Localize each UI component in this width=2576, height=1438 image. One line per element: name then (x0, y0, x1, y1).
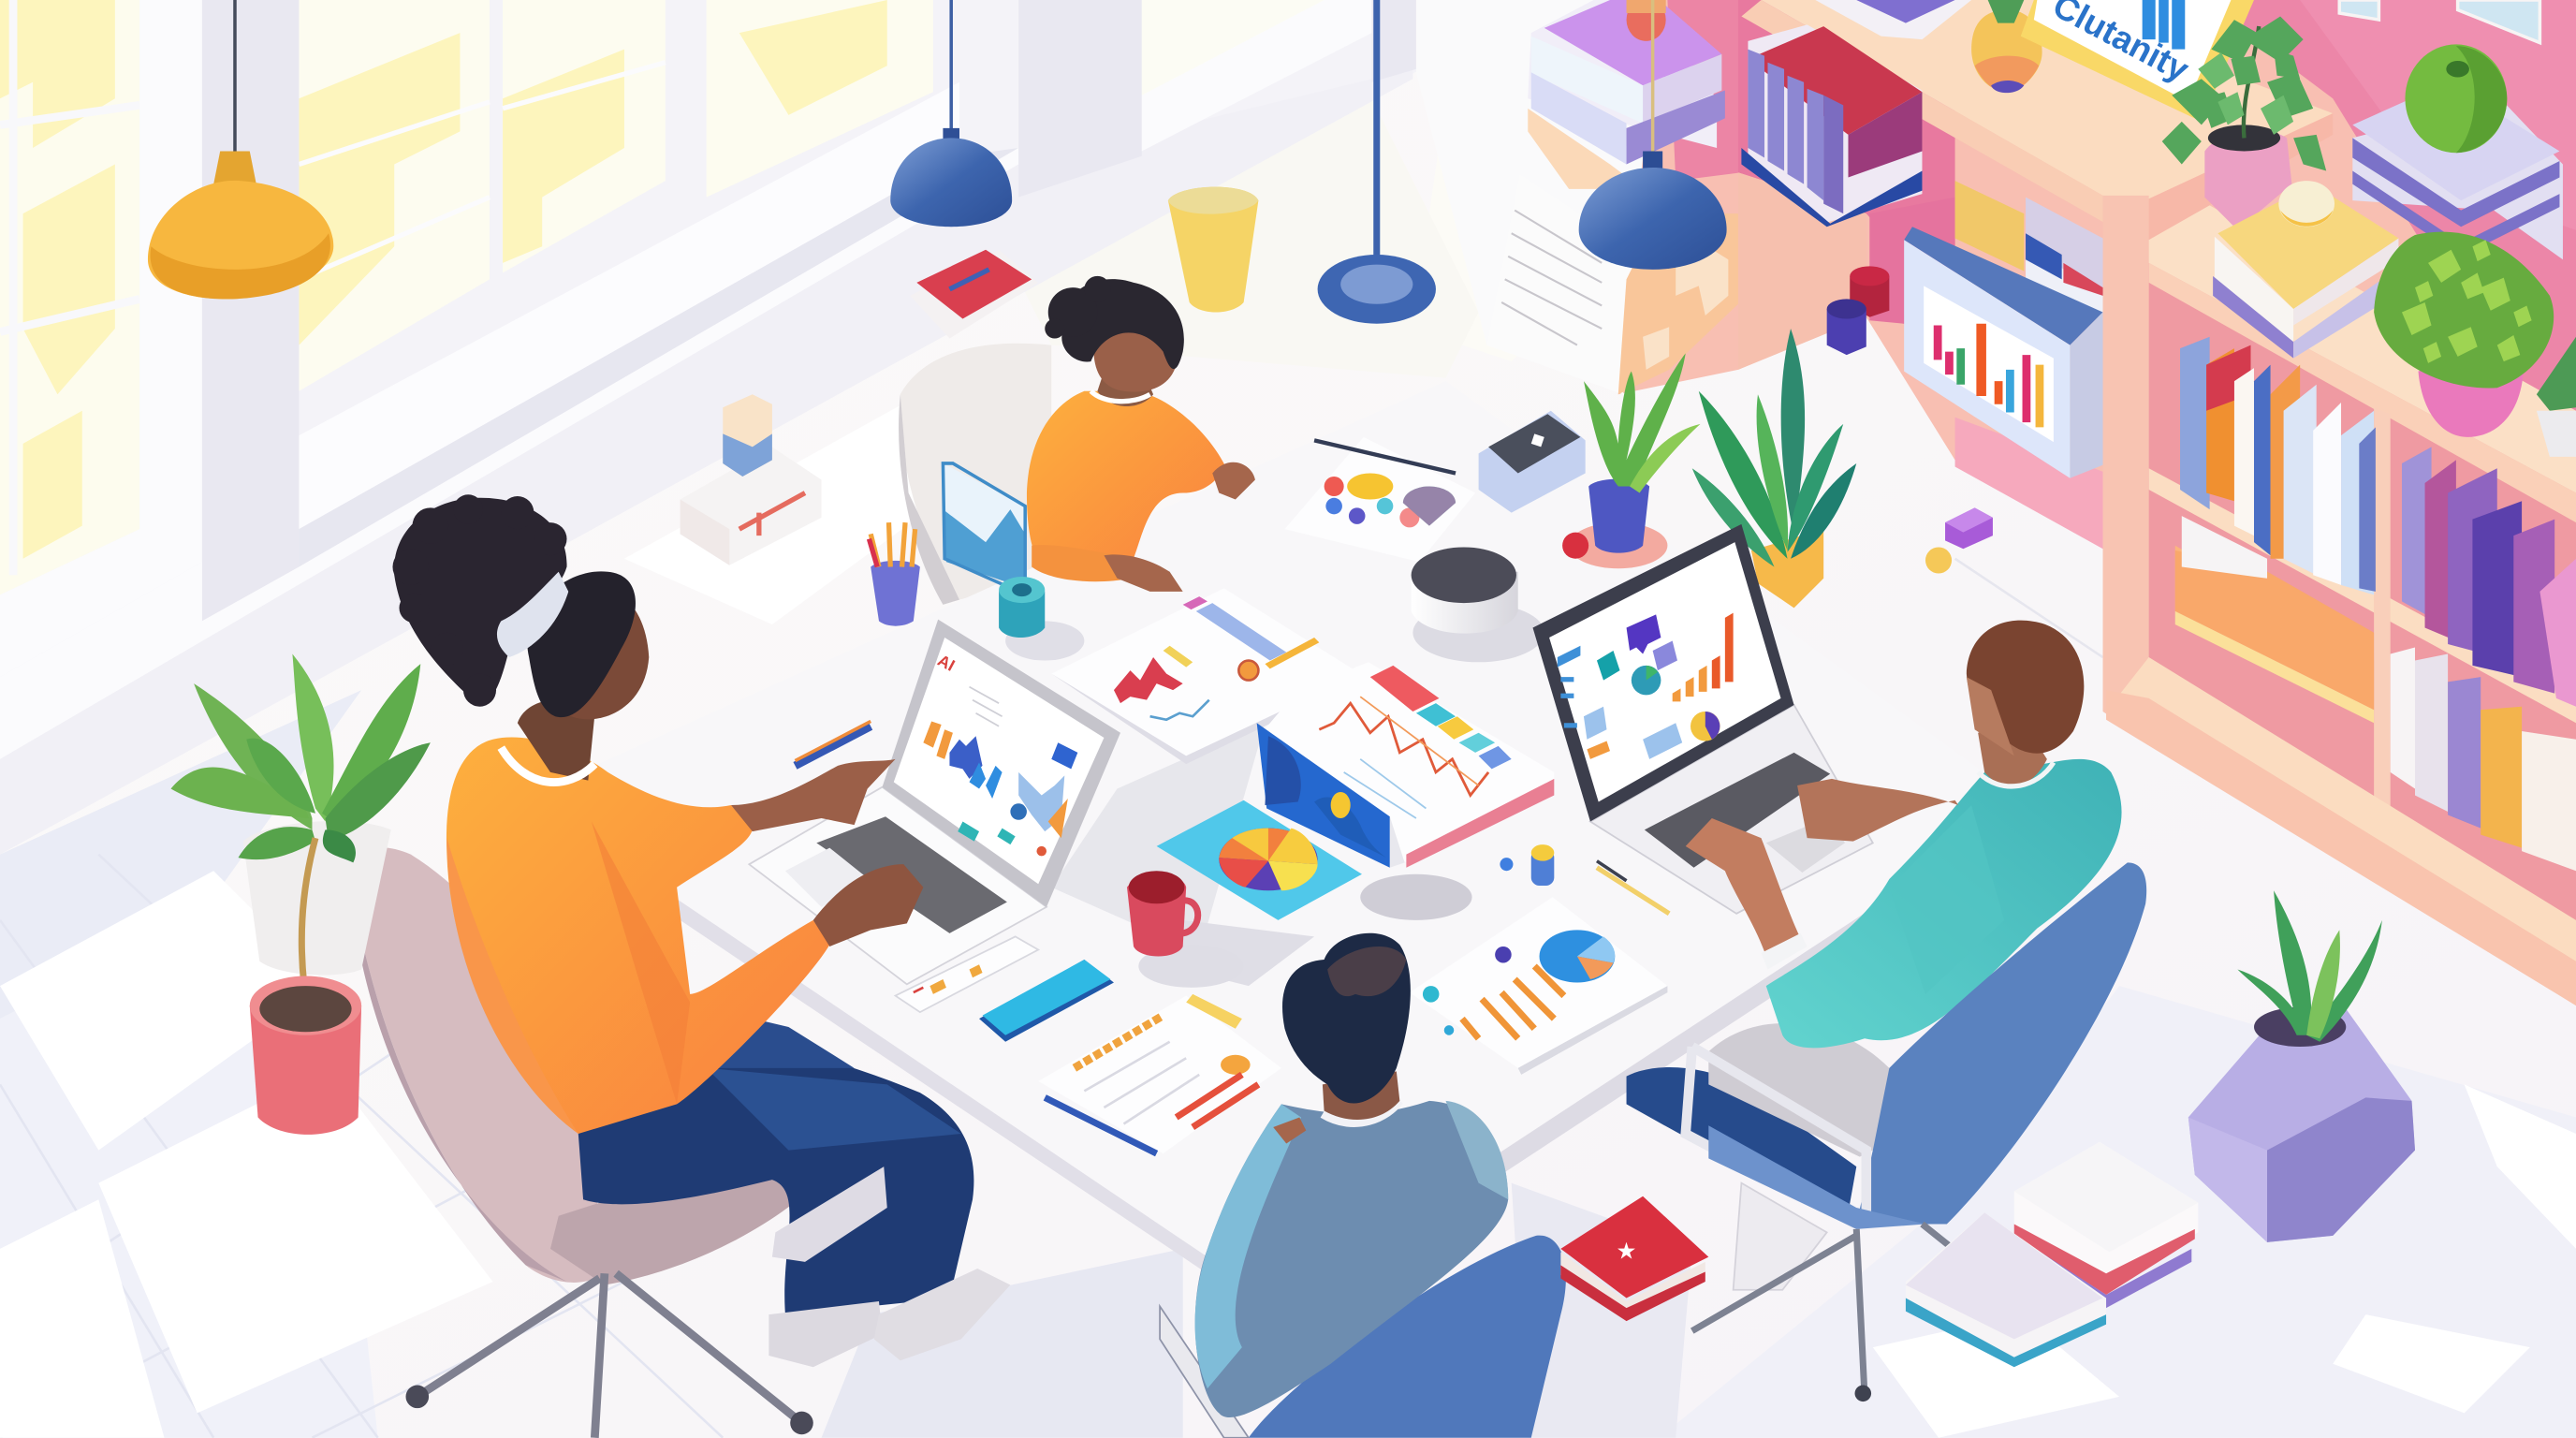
pencil cup (869, 522, 920, 626)
picture frames on wall (2339, 0, 2539, 43)
lamp: yellow (148, 0, 333, 299)
torso (1766, 759, 2122, 1048)
palette sheet (1284, 437, 1475, 562)
boxes near wall (681, 394, 822, 565)
yellow drink glass (1168, 187, 1258, 312)
head (542, 589, 649, 719)
blue map card (1257, 723, 1405, 868)
yellow vase (1971, 0, 2042, 93)
plant with pink pot on shelf (2162, 17, 2326, 230)
chart panel in front of chair (943, 463, 1025, 592)
bookcase side (2103, 196, 2149, 742)
scrunchie (497, 572, 568, 657)
plant: left potted tree (171, 654, 431, 1019)
small toy blocks (1925, 507, 1993, 574)
orange storage box (2175, 516, 2374, 723)
legs: jeans (578, 1019, 973, 1314)
potted plant blue pot (1562, 353, 1701, 568)
torso (1195, 1101, 1508, 1417)
blocks and pen on table (1500, 844, 1669, 914)
shelf: top board (1761, 0, 2333, 198)
book stacks: floor right (1906, 1142, 2198, 1367)
pie card (1157, 800, 1362, 920)
small note under laptop (896, 936, 1038, 1012)
binders on wall shelf (1741, 24, 1922, 227)
seat (1708, 1023, 1889, 1157)
chart sheet: bottom right (1410, 897, 1667, 1075)
table (526, 381, 2034, 1321)
chair: top person (899, 344, 1051, 605)
laptop: right (1533, 524, 1873, 914)
potted plant large green (1692, 329, 1856, 608)
speaker mug (1412, 547, 1518, 634)
book stack far (910, 250, 1038, 339)
window: far left (0, 0, 202, 677)
report sheet: top center (1051, 588, 1360, 764)
floor lamp stand (1318, 0, 1436, 324)
lamp: blue left (890, 0, 1012, 227)
red book: ★ (1617, 1239, 1637, 1264)
arms (1797, 779, 1958, 842)
red book (1560, 1196, 1708, 1321)
lamp: blue right (1579, 0, 1727, 270)
plant: purple vase (2188, 890, 2415, 1242)
window: far right (1142, 0, 1325, 95)
window: centre panes (299, 0, 933, 391)
pencil on table (795, 721, 871, 766)
neck and collar (518, 700, 594, 781)
person: right man (1627, 621, 2146, 1401)
chair: blue (1249, 1236, 1566, 1438)
books on top shelf (1815, 0, 1971, 39)
hair bun (392, 494, 567, 707)
books on lower-left shelf (2180, 337, 2376, 594)
small canisters (1827, 266, 1889, 355)
chair: mauve (348, 847, 829, 1438)
report clipboard (1038, 994, 1281, 1153)
pink back wall and bookcase (1416, 0, 2576, 1005)
shoes (768, 1301, 882, 1367)
book stack: top left (1528, 0, 1725, 189)
arms skin (731, 759, 896, 831)
neck (1978, 723, 2047, 786)
person: top (orange sweater) (943, 276, 1255, 592)
head (1967, 621, 2084, 754)
pot: red (250, 976, 361, 1135)
chart booklet: center (1262, 662, 1554, 868)
wall with windows (0, 0, 1421, 855)
device box (1479, 411, 1586, 513)
legs (1627, 1067, 1856, 1212)
laptop: left: AI (935, 651, 958, 675)
person: woman left (348, 494, 1010, 1438)
person: bottom (1160, 933, 1566, 1438)
book stack with cup (2213, 181, 2405, 359)
chart display box (1904, 227, 2103, 478)
document on wall corner (1486, 174, 1738, 394)
collar (1323, 1101, 1399, 1123)
red mug (1127, 871, 1198, 956)
storage cubes on wall shelf (1955, 181, 2103, 320)
bushy plant pink pot (2374, 232, 2576, 457)
chair: blue (1686, 862, 2146, 1401)
smartphone (979, 960, 1114, 1042)
head (1282, 933, 1411, 1103)
books on lower-right shelf (2391, 447, 2576, 871)
torso sweater (446, 738, 829, 1134)
sign (2021, 0, 2254, 122)
green ball on books (2352, 44, 2563, 259)
vase on books (1627, 0, 1666, 41)
laptop: left (749, 620, 1120, 984)
teal bottle (999, 577, 1045, 638)
